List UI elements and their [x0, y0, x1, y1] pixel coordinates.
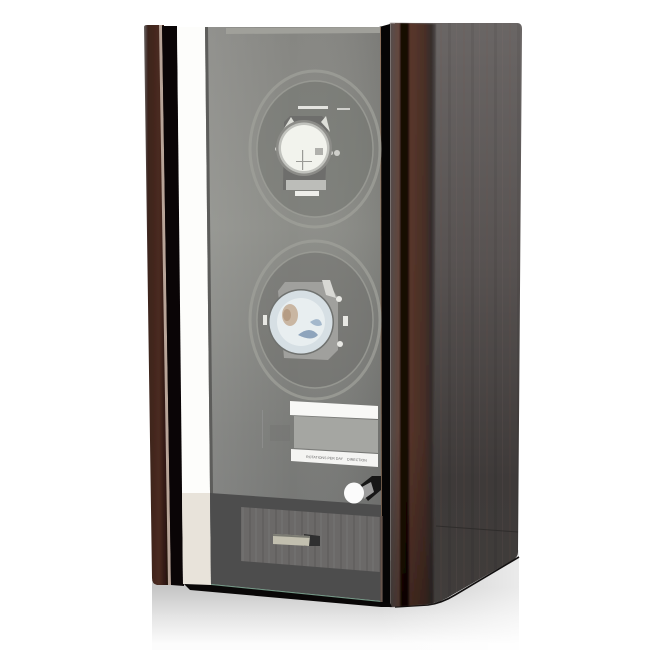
- black channel: [162, 26, 184, 586]
- white display header: [290, 401, 378, 419]
- left trim strip: [159, 25, 171, 585]
- left corner post: [144, 25, 172, 585]
- right corner post: [390, 23, 436, 607]
- right black channel: [379, 24, 390, 607]
- lower winder cradle: [250, 241, 380, 399]
- reflection strip right of glass: [380, 516, 383, 602]
- watch 1: [275, 106, 350, 196]
- glass bottom edge: [211, 584, 381, 603]
- top light bar: [226, 27, 380, 34]
- inlay cream lower part: [182, 493, 211, 585]
- faint digits reflection: [262, 410, 290, 448]
- glass edge highlight: [379, 27, 382, 602]
- base shadow line: [184, 584, 392, 607]
- upper winder cradle: [250, 71, 380, 227]
- panel: right side of cabinet: [392, 23, 522, 607]
- white inlay strip: [177, 27, 211, 585]
- drawer front: [241, 507, 380, 572]
- watch 2: [263, 280, 348, 360]
- rotary knob: [344, 476, 381, 504]
- drawer handle: [273, 534, 320, 546]
- control label strip: DIRECTION: [347, 458, 367, 463]
- panel seam: [436, 526, 518, 532]
- digital display window: [294, 416, 378, 453]
- panel: glass door with interior: [184, 27, 392, 607]
- floor reflection: [152, 550, 519, 650]
- control label strip: ROTATIONS PER DAY: [306, 455, 344, 461]
- dark lower section: [210, 493, 381, 601]
- control label strip: [291, 449, 378, 467]
